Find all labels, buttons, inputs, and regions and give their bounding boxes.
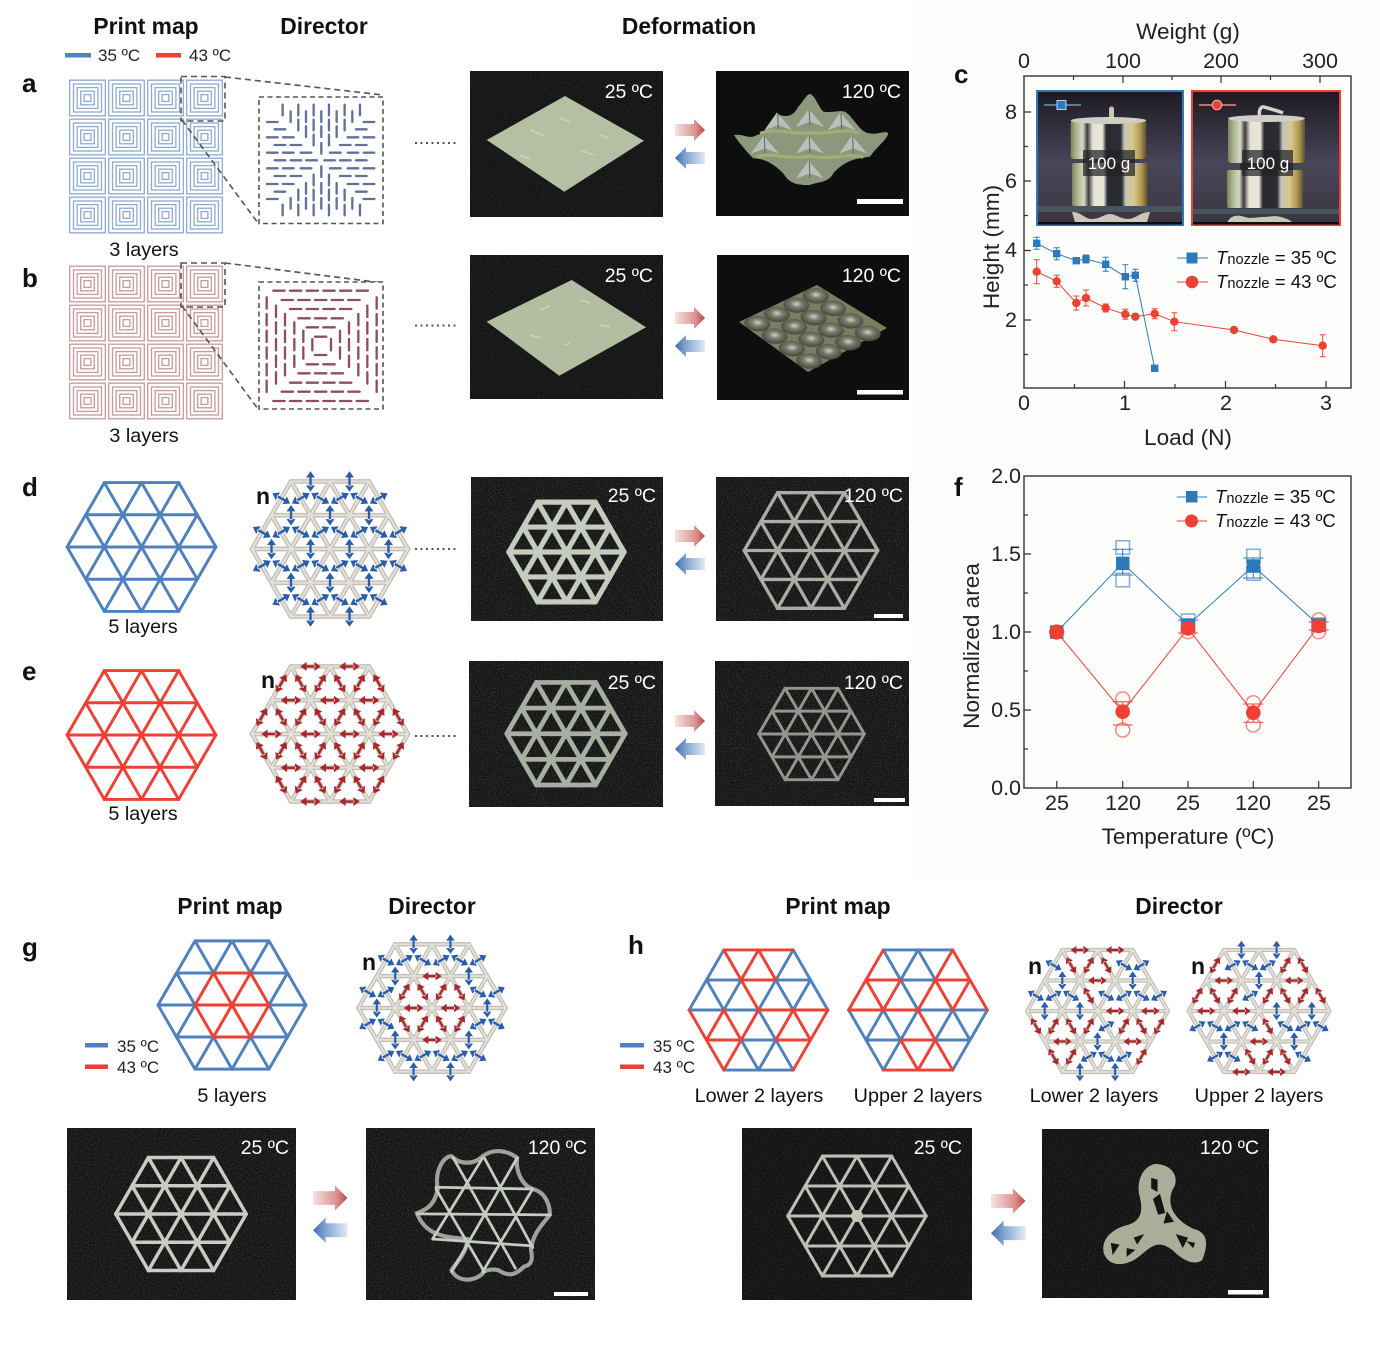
label a: a [22, 68, 37, 98]
data series: 43C [1049, 613, 1329, 737]
panel b [22, 255, 909, 447]
director d [231, 448, 429, 650]
photo d 120C: 120 ºC [844, 485, 903, 507]
photo b 25C: 25 ºC [605, 265, 653, 287]
heading: Print map: Print map [93, 13, 199, 39]
y axis tick labels: 1.0 [991, 620, 1021, 644]
x axis tick labels: 25 [1176, 791, 1200, 815]
top axis tick labels: 200 [1203, 49, 1239, 73]
legend g: 43 ºC [117, 1058, 159, 1077]
axis title: Load: Load (N) [1144, 425, 1232, 450]
heating and cooling arrows b [675, 307, 705, 357]
dotted connector e [415, 735, 458, 737]
print map e [49, 638, 234, 832]
director e [233, 633, 427, 835]
x axis tick labels: 120 [1105, 791, 1141, 815]
inset photo: 35C lattice under weight [1037, 91, 1183, 225]
axis title: Height: Height (mm) [979, 185, 1004, 309]
x axis tick labels: 25 [1045, 791, 1069, 815]
label e: e [22, 656, 36, 686]
heading: Director g: Director [388, 893, 476, 919]
photo g 120C: 120 ºC [528, 1137, 587, 1159]
x axis tick labels: 2 [1220, 391, 1232, 415]
y axis tick labels: 2 [1005, 308, 1017, 332]
legend g [85, 1037, 159, 1077]
legend f [1177, 486, 1336, 531]
heating and cooling arrows e [675, 710, 705, 760]
dotted connector b [415, 324, 458, 326]
axis title: Normalized area: Normalized area [959, 563, 984, 729]
panel f: normalized area chart [954, 464, 1351, 849]
label d: d [22, 472, 38, 502]
photo g 25C [67, 1128, 296, 1300]
y axis tick labels [1005, 100, 1017, 332]
data series: 43C [1032, 260, 1327, 357]
axes frame and ticks [1024, 76, 1351, 388]
zoom selection a [181, 76, 383, 223]
zoom selection b [181, 263, 383, 409]
director g [339, 912, 525, 1104]
legend g: 35 ºC [117, 1037, 159, 1056]
layer caption a: 3 layers [109, 239, 179, 261]
label f: f [954, 472, 963, 502]
photo g 25C: 25 ºC [241, 1137, 289, 1159]
legend h: 43 ºC [653, 1058, 695, 1077]
director: lower layers [1006, 920, 1187, 1102]
label b: b [22, 263, 38, 293]
photo b 25C [470, 255, 663, 399]
photo b 120C: 120 ºC [842, 265, 901, 287]
layer caption e: 5 layers [108, 803, 178, 825]
axis title: Temperature: Temperature (ºC) [1102, 824, 1274, 849]
label h: h [628, 930, 644, 960]
y axis tick labels: 1.5 [991, 542, 1021, 566]
print map: lower layers [672, 920, 845, 1100]
label c: c [954, 59, 968, 89]
panel d [22, 448, 909, 650]
top axis tick labels: 0 [1018, 49, 1030, 73]
panel e [22, 633, 909, 835]
top axis tick labels: 300 [1302, 49, 1338, 73]
heating and cooling arrows a [675, 119, 705, 169]
heading: Director h: Director [1135, 893, 1223, 919]
caption: lower print map: Lower 2 layers [695, 1085, 823, 1107]
caption: lower director: Lower 2 layers [1030, 1085, 1158, 1107]
y axis tick labels: 8 [1005, 100, 1017, 124]
director: upper layers [1170, 920, 1351, 1102]
legend h [620, 1037, 695, 1077]
director a [259, 97, 383, 224]
heating and cooling arrows h [991, 1188, 1026, 1246]
top axis tick labels: 100 [1105, 49, 1141, 73]
panel h [620, 893, 1351, 1306]
director symbol upper: n [1191, 953, 1205, 979]
photo d 120C [716, 464, 909, 637]
layer caption d: 5 layers [108, 616, 178, 638]
legend c: Tnozzle = 35 ºC [1216, 247, 1337, 268]
y axis tick labels: 6 [1005, 169, 1017, 193]
photo h 120C [1042, 1129, 1269, 1298]
y axis tick labels [991, 464, 1021, 800]
x axis tick labels: 25 [1307, 791, 1331, 815]
data series: 35C [1033, 237, 1158, 372]
legend f: Tnozzle = 35 ºC [1215, 486, 1336, 507]
photo b 120C [717, 255, 909, 400]
heating and cooling arrows g [313, 1185, 348, 1243]
top axis tick labels [1018, 49, 1338, 73]
panel c: height versus load chart [954, 19, 1351, 450]
photo h 25C [742, 1126, 972, 1306]
legend: print temperature: 35 ºC [98, 46, 140, 65]
legend h: 35 ºC [653, 1037, 695, 1056]
panel g [22, 893, 595, 1300]
legend f: Tnozzle = 43 ºC [1215, 510, 1336, 531]
panel background: right column [916, 0, 1380, 878]
data series: 35C [1050, 541, 1329, 639]
heading: Deformation: Deformation [622, 13, 756, 39]
director b [259, 282, 383, 409]
panel a [22, 68, 909, 261]
label g: g [22, 932, 38, 962]
legend c [1177, 247, 1337, 292]
director symbol lower: n [1028, 953, 1042, 979]
photo e 120C [715, 661, 909, 806]
photo h 120C: 120 ºC [1200, 1137, 1259, 1159]
caption: upper print map: Upper 2 layers [854, 1085, 982, 1107]
heading: Print map h: Print map [785, 893, 891, 919]
print map: upper layers [831, 920, 1005, 1100]
director symbol d: n [256, 483, 270, 509]
photo a 120C: 120 ºC [842, 81, 901, 103]
print map d [49, 450, 234, 644]
y axis tick labels: 0.0 [991, 776, 1021, 800]
print map b [70, 266, 222, 419]
photo e 25C: 25 ºC [608, 672, 656, 694]
dotted connector d [415, 548, 458, 550]
legend c: Tnozzle = 43 ºC [1216, 271, 1337, 292]
director symbol g: n [362, 949, 376, 975]
x axis tick labels: 120 [1235, 791, 1271, 815]
photo g 120C [366, 1128, 595, 1300]
axes frame and ticks [1024, 476, 1351, 788]
y axis tick labels: 0.5 [991, 698, 1021, 722]
inset photo: 43C lattice under weight [1192, 91, 1340, 225]
photo a 25C: 25 ºC [605, 81, 653, 103]
print map g [140, 909, 324, 1101]
axis title: Weight: Weight (g) [1136, 19, 1240, 44]
inset photo: 43C lattice under weight: 100 g [1247, 154, 1289, 173]
layer caption g: 5 layers [197, 1085, 267, 1107]
photo h 25C: 25 ºC [914, 1137, 962, 1159]
dotted connector a [415, 142, 458, 144]
legend: print temperature: 43 ºC [189, 46, 231, 65]
y axis tick labels: 4 [1005, 238, 1017, 262]
heading: Print map g: Print map [177, 893, 283, 919]
inset photo: 35C lattice under weight: 100 g [1088, 154, 1130, 173]
x axis tick labels: 1 [1119, 391, 1131, 415]
heading: Director: Director [280, 13, 368, 39]
photo d 25C: 25 ºC [608, 485, 656, 507]
photo a 120C [716, 71, 909, 216]
heating and cooling arrows d [675, 525, 705, 575]
caption: upper director: Upper 2 layers [1195, 1085, 1323, 1107]
x axis tick labels [1018, 391, 1332, 415]
photo e 120C: 120 ºC [844, 672, 903, 694]
x axis tick labels [1045, 791, 1331, 815]
print map a [70, 80, 222, 233]
y axis tick labels: 2.0 [991, 464, 1021, 488]
x axis tick labels: 3 [1320, 391, 1332, 415]
photo a 25C [470, 71, 663, 217]
photo e 25C [469, 657, 663, 811]
layer caption b: 3 layers [109, 425, 179, 447]
x axis tick labels: 0 [1018, 391, 1030, 415]
director symbol e: n [261, 667, 275, 693]
photo d 25C [471, 477, 663, 627]
legend: print temperature [65, 46, 231, 65]
